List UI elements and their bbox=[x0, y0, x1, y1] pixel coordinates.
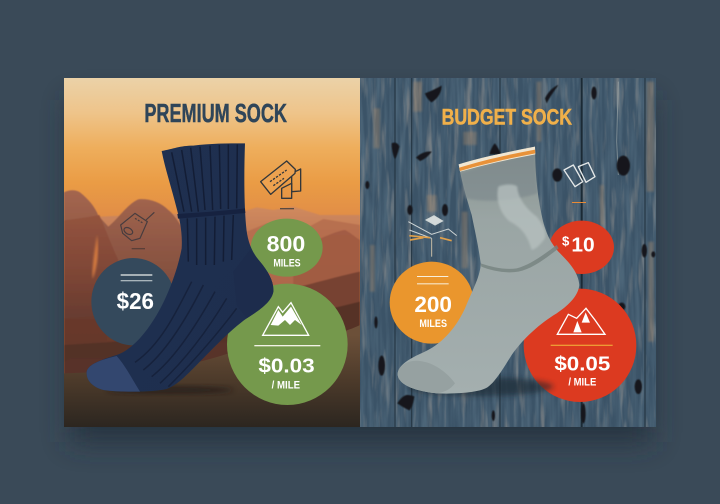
icon: price tags bbox=[261, 161, 301, 198]
icon: torn price tags bbox=[564, 163, 595, 187]
panel: premium sock bbox=[64, 78, 360, 427]
sock: premium navy ribbed bbox=[87, 143, 273, 394]
icon: worn shoe sketch bbox=[408, 216, 457, 257]
title: BUDGET SOCK bbox=[442, 105, 572, 130]
price circle: $26 bbox=[117, 288, 154, 314]
dash under tags bbox=[280, 208, 294, 209]
sunset sky bbox=[64, 78, 360, 374]
cost per mile circle: / MILE bbox=[272, 379, 300, 391]
price circle: 10 bbox=[571, 234, 595, 257]
dash under tag bbox=[132, 248, 145, 249]
cost per mile circle: $0.05 bbox=[554, 353, 610, 376]
mileage circle: MILES bbox=[419, 318, 447, 330]
weathered wood background bbox=[360, 78, 656, 427]
cost per mile circle bbox=[227, 284, 348, 405]
panel: budget sock bbox=[360, 78, 656, 427]
dash under tags bbox=[572, 202, 586, 203]
foreground hillside bbox=[64, 325, 360, 427]
mileage circle: 800 bbox=[267, 232, 305, 257]
title: PREMIUM SOCK bbox=[144, 98, 287, 128]
sock: budget grey worn bbox=[398, 147, 579, 396]
mileage circle bbox=[251, 219, 323, 277]
panel drop shadow bbox=[70, 100, 652, 442]
price circle bbox=[91, 258, 175, 345]
cost per mile circle: $0.03 bbox=[258, 354, 315, 377]
icon: tag outline bbox=[121, 212, 154, 241]
mileage circle: 200 bbox=[414, 292, 452, 317]
distant mountain ranges bbox=[64, 190, 360, 375]
cost per mile circle bbox=[524, 289, 636, 402]
price circle: $ bbox=[562, 235, 569, 249]
cost per mile circle: / MILE bbox=[568, 377, 596, 389]
mileage circle: MILES bbox=[273, 258, 301, 270]
price circle bbox=[549, 221, 614, 274]
weathered holes bbox=[365, 85, 655, 423]
mileage circle bbox=[390, 262, 474, 344]
